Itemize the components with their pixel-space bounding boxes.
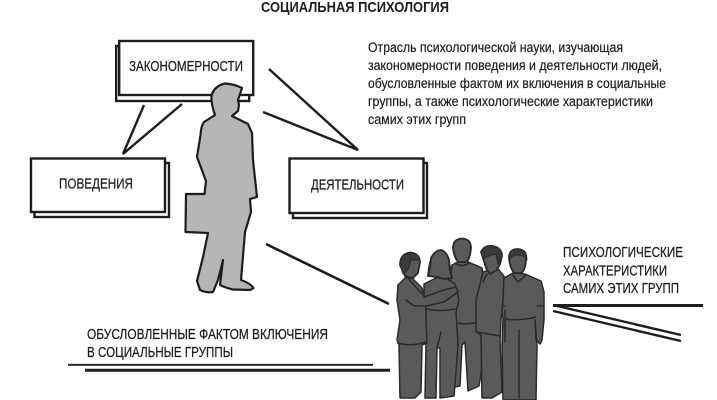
definition text block: закономерности поведения и деятельности людей,	[368, 58, 662, 73]
box: regularities	[116, 41, 253, 101]
definition text block: группы, а также психологические характеристики	[368, 94, 653, 109]
box: behavior	[31, 158, 169, 217]
person: right	[500, 249, 544, 400]
definition text block: обусловленные фактом их включения в социальные	[368, 76, 666, 91]
label: psychological characteristics: САМИХ ЭТИХ ГРУПП	[563, 280, 679, 297]
group of people	[397, 238, 544, 400]
definition text block	[368, 40, 666, 127]
person: woman	[424, 250, 459, 398]
label: psychological characteristics: ХАРАКТЕРИСТИКИ	[563, 262, 667, 280]
definition text block: самих этих групп	[368, 112, 466, 127]
box: activity	[290, 158, 427, 218]
box: behavior: ПОВЕДЕНИЯ	[59, 176, 133, 192]
box: regularities: ЗАКОНОМЕРНОСТИ	[129, 58, 243, 75]
pointer lines: characteristics	[553, 305, 703, 341]
icon: man with briefcase	[186, 84, 257, 292]
person: center back	[448, 238, 486, 391]
arrow: regularities to activity	[263, 69, 358, 150]
label: conditioned by inclusion in social groups: ОБУСЛОВЛЕННЫЕ ФАКТОМ ВКЛЮЧЕНИЯ	[87, 326, 328, 343]
definition text block: Отрасль психологической науки, изучающая	[368, 40, 623, 55]
label: conditioned by inclusion in social groups: В СОЦИАЛЬНЫЕ ГРУППЫ	[87, 344, 233, 361]
label: conditioned by inclusion in social groups	[87, 326, 328, 361]
label: psychological characteristics	[563, 244, 683, 297]
connector: man to group	[266, 244, 389, 304]
pointer lines: social groups	[68, 365, 390, 370]
arrow: regularities to behavior	[123, 104, 182, 154]
person: left with arm	[397, 252, 458, 398]
label: psychological characteristics: ПСИХОЛОГИЧЕСКИЕ	[563, 244, 683, 261]
person: fourth	[476, 246, 504, 398]
box: activity: ДЕЯТЕЛЬНОСТИ	[311, 176, 404, 194]
